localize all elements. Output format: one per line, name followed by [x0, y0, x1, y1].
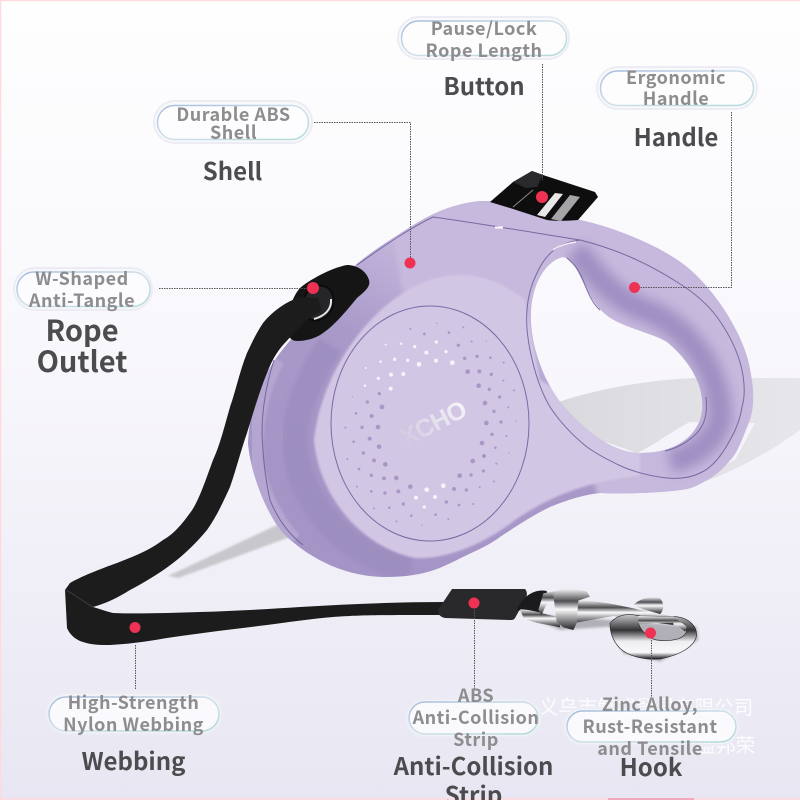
- pill text: shell: Durable ABS: [176, 101, 291, 127]
- pill: button: [398, 17, 569, 59]
- hook shadow: [520, 613, 698, 662]
- heading: shell: Shell: [203, 152, 263, 187]
- snap ring: [610, 615, 697, 659]
- pill text: strip: ABS: [457, 682, 494, 708]
- pill text: handle: Handle: [643, 85, 709, 111]
- webbing knot: [517, 591, 548, 613]
- rope outlet: [287, 265, 369, 341]
- pill: handle: [597, 67, 757, 109]
- button edge: [513, 190, 533, 207]
- pill text: shell: Shell: [210, 119, 257, 145]
- webbing strap: [65, 297, 445, 645]
- pill: rope outlet: [14, 268, 152, 310]
- ground shadows: [168, 378, 800, 578]
- heading: hook: Hook: [620, 748, 683, 783]
- heading: handle: Handle: [634, 118, 718, 153]
- callout: shell: [154, 101, 312, 187]
- leader line: hook: [650, 640, 652, 698]
- leader line: shell: [314, 122, 410, 258]
- hole inner line lower: [665, 397, 707, 451]
- heading: strip: Anti-Collision: [393, 747, 553, 782]
- pill: shell: [154, 101, 312, 143]
- webbing fold: [65, 590, 93, 607]
- rod: [577, 600, 673, 625]
- callout: strip: [393, 682, 553, 800]
- leader line: strip: [474, 610, 476, 690]
- callout dot: handle: [629, 282, 640, 293]
- bottom pink bar: [608, 798, 694, 800]
- collar: [553, 589, 590, 630]
- watermark: 义乌市鲍戎贸易有限公司: [539, 691, 753, 720]
- leader line: rope outlet: [159, 288, 307, 290]
- pill text: hook: Zinc Alloy,: [602, 691, 698, 717]
- silver band: [537, 193, 563, 217]
- pill: hook: [564, 708, 739, 745]
- reel body: [248, 201, 760, 577]
- top sensor mark: [495, 226, 503, 228]
- pill text: handle: Ergonomic: [626, 64, 726, 90]
- heading: webbing: Webbing: [82, 742, 185, 777]
- callout: hook: [564, 691, 739, 783]
- callout dot: strip: [468, 598, 480, 608]
- pill text: hook: and Tensile: [597, 735, 703, 761]
- metal hook: [517, 589, 698, 662]
- perforation dots: [344, 323, 516, 526]
- bright dots: [364, 340, 455, 509]
- pill text: button: Pause/Lock: [431, 15, 537, 41]
- pill text: rope outlet: Anti-Tangle: [28, 287, 135, 313]
- ring highlight: [314, 299, 331, 319]
- side loop: [520, 609, 560, 627]
- top ridge tone: [400, 220, 753, 494]
- heading: rope outlet: Outlet: [37, 339, 127, 381]
- pill text: rope outlet: W-Shaped: [35, 265, 129, 291]
- leader line: button: [542, 64, 544, 180]
- watermark: 盛邦荣: [697, 729, 755, 758]
- pill text: strip: Strip: [453, 726, 499, 752]
- callout: rope outlet: [14, 265, 152, 381]
- leader line: webbing: [134, 645, 136, 690]
- gate bar: [638, 616, 687, 632]
- watermark: [539, 691, 755, 758]
- pill text: hook: Rust-Resistant: [582, 713, 718, 739]
- seam lines: [357, 217, 744, 478]
- pill: webbing: [46, 693, 222, 734]
- heading: button: Button: [443, 67, 525, 102]
- callout dot: shell: [404, 258, 416, 268]
- callout dot: rope outlet: [307, 282, 319, 294]
- shell side band: [248, 201, 753, 577]
- round panel outline: [331, 306, 529, 541]
- callout dot: webbing: [130, 622, 140, 633]
- pill text: button: Rope Length: [426, 37, 542, 63]
- clipped shell shading: [256, 201, 760, 570]
- callout: handle: [597, 64, 757, 153]
- heading: rope outlet: Rope: [45, 308, 119, 350]
- shell face: [314, 275, 640, 558]
- anti-collision strip: [438, 589, 527, 620]
- pill text: webbing: High-Strength: [68, 689, 199, 715]
- highlight on seam: [553, 242, 576, 250]
- side band dark tone: [295, 345, 410, 570]
- lock button: [490, 171, 598, 221]
- upper loop: [538, 590, 560, 615]
- pill: strip: [406, 699, 541, 737]
- pill text: strip: Anti-Collision: [412, 704, 539, 730]
- left seam line: [262, 360, 303, 545]
- leader line: handle: [640, 112, 732, 288]
- brand logo: XCHO: [396, 395, 471, 452]
- snap knob: [633, 597, 663, 614]
- top facet: [513, 171, 543, 188]
- handle shadow: [575, 250, 720, 462]
- pill text: webbing: Nylon Webbing: [63, 711, 204, 737]
- grey band: [551, 195, 580, 221]
- outer rim tone: [256, 360, 295, 540]
- hole inner lines: [567, 258, 600, 310]
- outlet ring: [297, 280, 339, 326]
- callout dot: hook: [645, 628, 656, 638]
- callout: webbing: [46, 689, 222, 777]
- callout dot: button: [536, 191, 548, 203]
- callout: button: [398, 15, 569, 102]
